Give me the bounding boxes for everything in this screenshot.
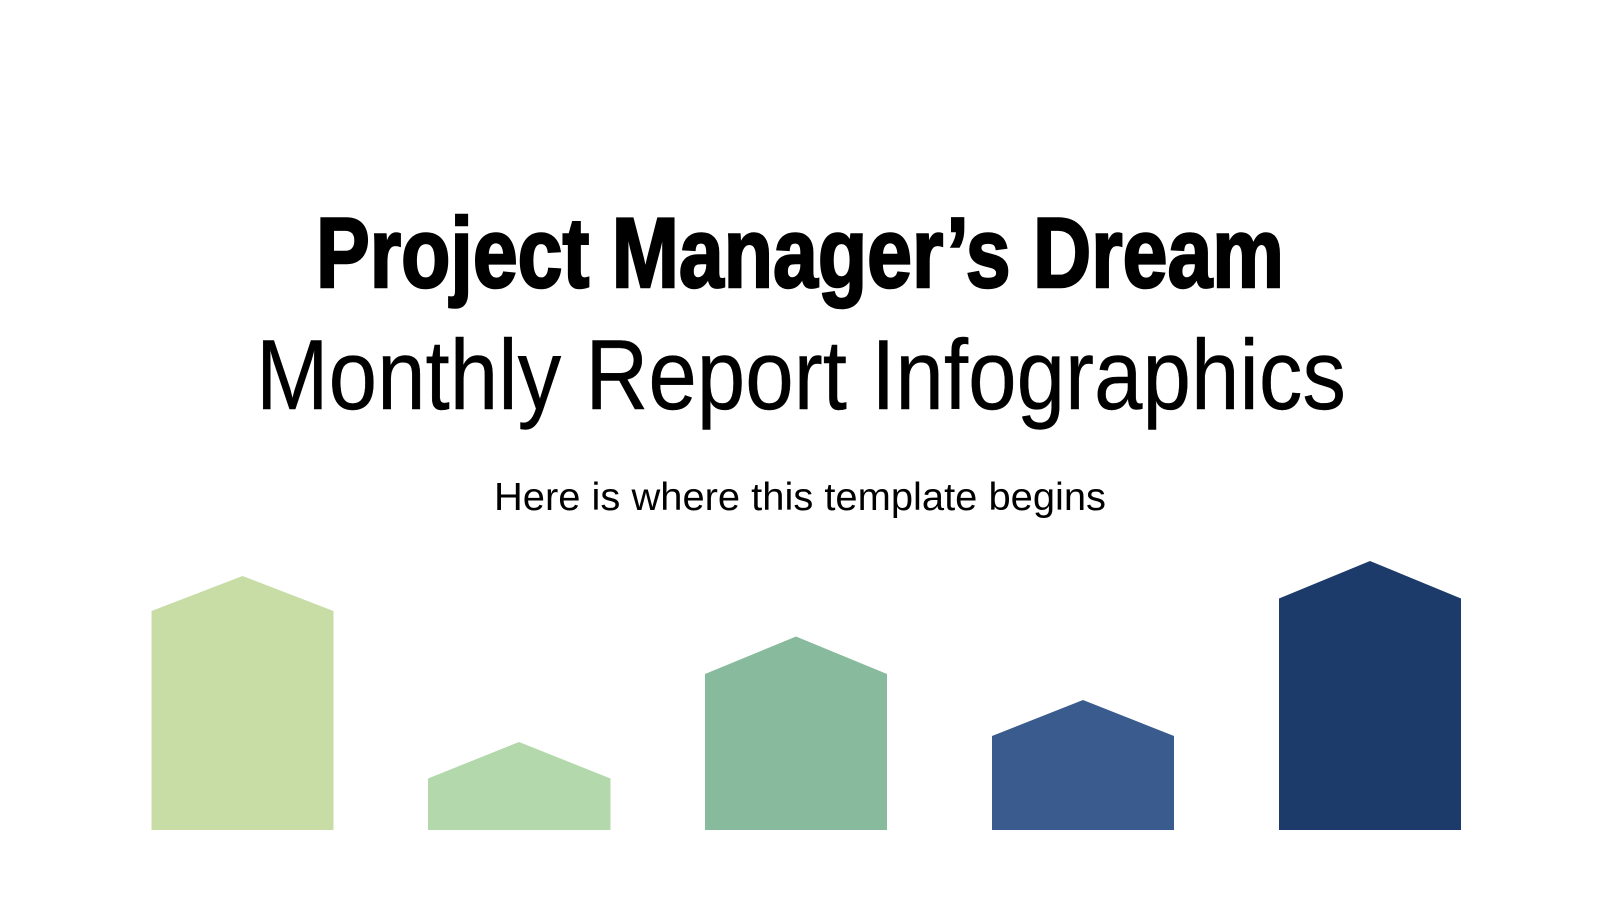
- bar 4: medium blue house: [992, 700, 1174, 830]
- bar 3: sage green house: [705, 636, 887, 830]
- title: regular line: Monthly Report Infographics: [256, 319, 1346, 430]
- bar chart: house-shaped bars: [152, 561, 1461, 830]
- bar 1: light lime house: [152, 576, 334, 830]
- bar 5: navy house: [1279, 561, 1461, 830]
- subtitle: Here is where this template begins: [494, 476, 1106, 519]
- bar 2: pale green house: [428, 742, 610, 830]
- title: bold line: Project Manager’s Dream: [316, 197, 1284, 308]
